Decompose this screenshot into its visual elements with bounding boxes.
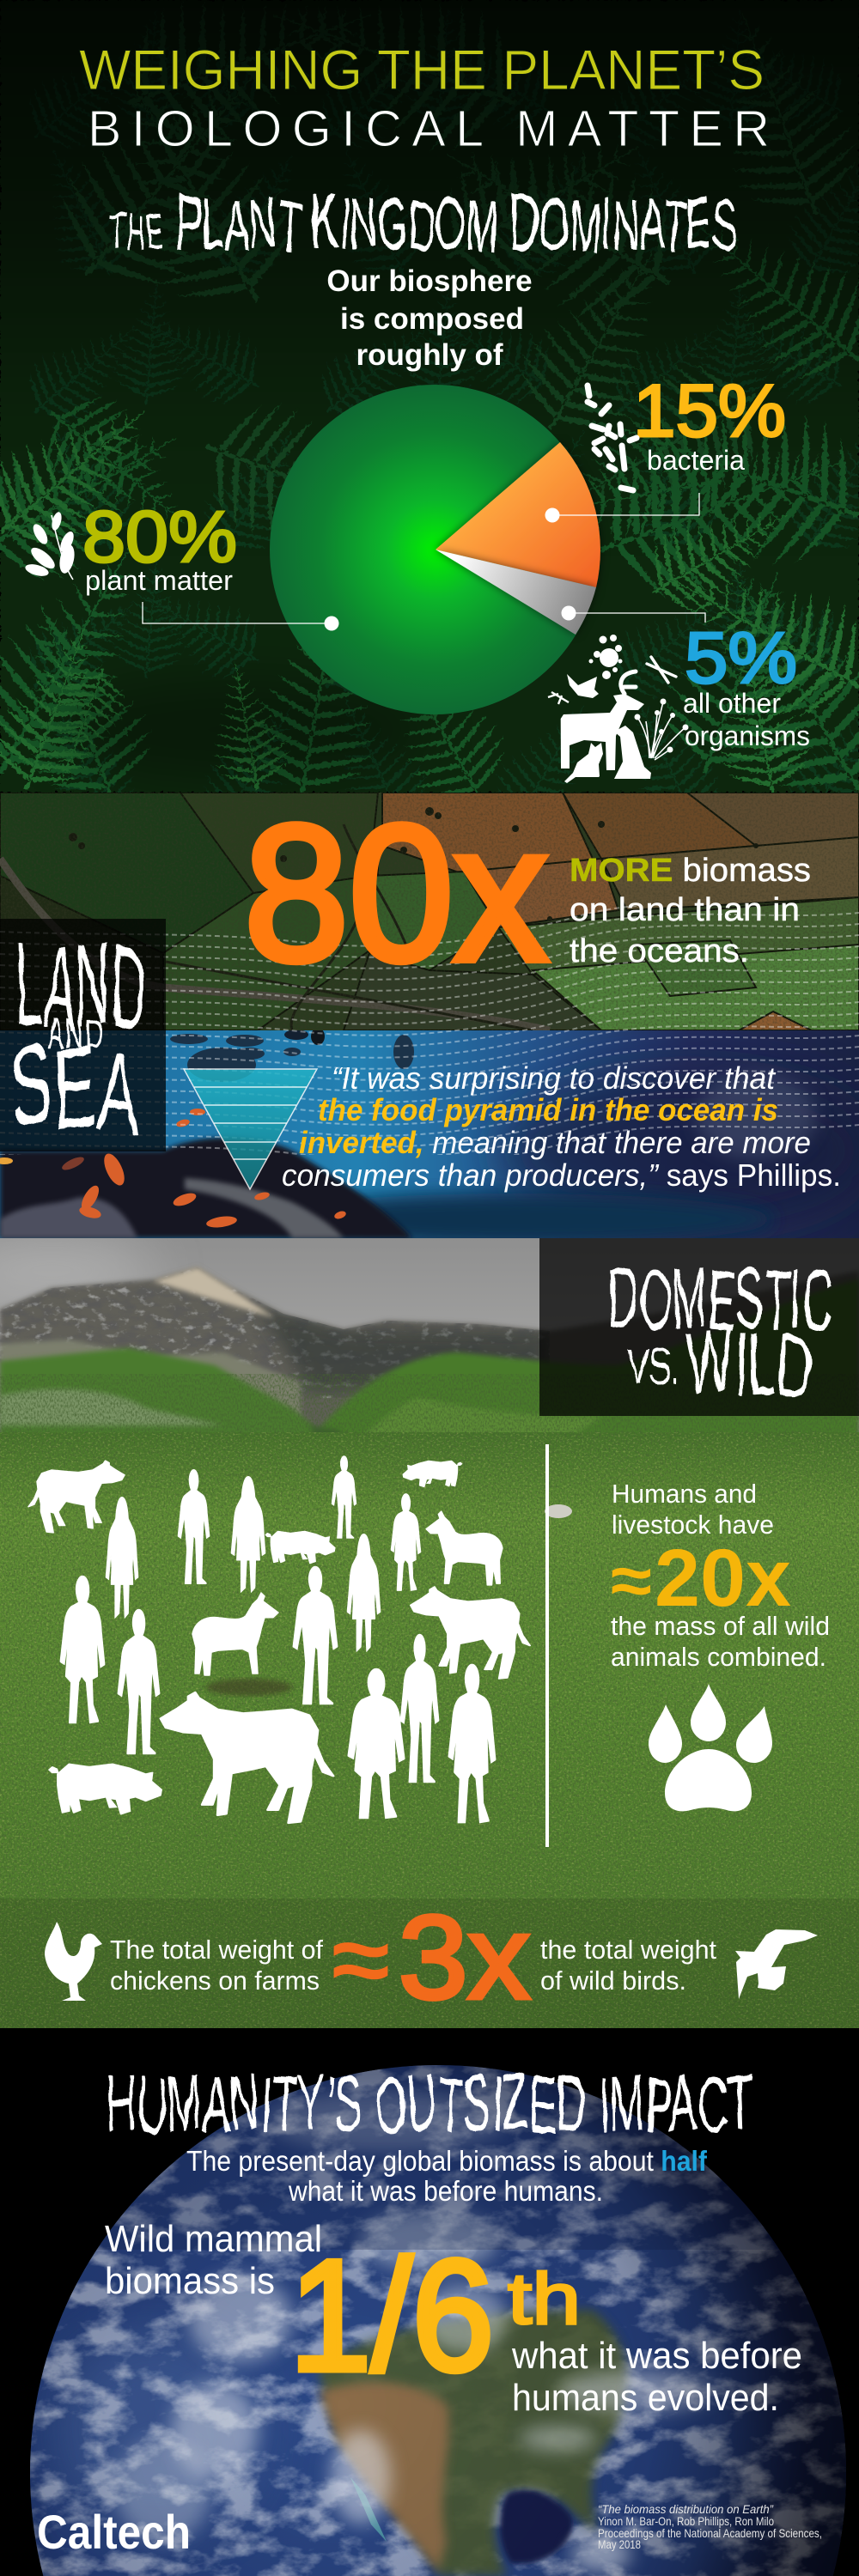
stat: 3x: 3x (399, 1892, 530, 2024)
fish (0, 1109, 347, 1229)
title box: land and sea (0, 919, 166, 1156)
text block: humans and livestock (611, 1479, 830, 1672)
citation: Yinon M. Bar-On, Rob Phillips, Ron Milo (598, 2514, 774, 2528)
icon: leaf sprig (24, 511, 76, 580)
leader dots (325, 508, 576, 630)
text block: before humans evolved (511, 2335, 802, 2419)
citation: “The biomass distribution on Earth” (598, 2502, 774, 2516)
quote (282, 1060, 841, 1193)
text block: wild birds: of wild birds. (540, 1965, 686, 1996)
text block: global biomass (186, 2145, 708, 2207)
stat: 5% other organisms: 5% (685, 617, 797, 698)
text block: intro (326, 264, 533, 372)
stat: 80% plant matter: 80% (82, 496, 237, 577)
text block: global biomass: The present-day global biomass is about half (186, 2145, 708, 2177)
pie chart (270, 385, 600, 714)
leader lines (143, 493, 705, 623)
pie slice: other organisms (436, 550, 596, 635)
text block: more biomass (570, 853, 811, 969)
panel: humanity's impact (30, 2065, 846, 2576)
text block: before humans evolved: humans evolved. (512, 2377, 779, 2419)
title line 2: BIOLOGICAL MATTER (88, 100, 770, 157)
heading: sea: SEA (0, 1021, 146, 1156)
text block: chickens: The total weight of (110, 1935, 323, 1965)
text block: wild mammal (105, 2218, 322, 2302)
text block: intro: is composed (340, 302, 524, 336)
wavy dashed lines (0, 902, 859, 1170)
seabed rock (0, 1138, 412, 1238)
citation (598, 2502, 822, 2551)
title line 1: WEIGHING THE PLANET’S (79, 38, 765, 101)
mountains (0, 1267, 859, 1432)
text block: humans and livestock: 20x (655, 1533, 791, 1624)
text block: chickens: chickens on farms (110, 1965, 320, 1996)
quote: inverted, meaning that there are more (299, 1125, 811, 1160)
text block: humans and livestock: the mass of all wild (611, 1611, 830, 1641)
icon: other organisms (548, 635, 689, 783)
text block: intro: roughly of (356, 338, 503, 372)
text block: wild birds (540, 1935, 716, 1996)
text block: humans and livestock: animals combined. (611, 1642, 826, 1672)
panel: domestic vs wild (0, 1236, 859, 2028)
stat: 5% other organisms (683, 617, 810, 751)
text block: more biomass: the oceans. (570, 933, 749, 969)
text block: before humans evolved: what it was before (511, 2335, 802, 2377)
text block: wild birds: the total weight (540, 1935, 716, 1965)
title (79, 38, 770, 157)
stat: 80% plant matter: plant matter (85, 565, 233, 596)
text block: wild mammal: biomass is (105, 2260, 275, 2302)
land fields (0, 793, 859, 1030)
stat: 5% other organisms: all other (683, 688, 781, 719)
stat: 3x: ≈ (332, 1907, 390, 2013)
divider line (545, 1444, 549, 1847)
text block: humans and livestock: livestock have (612, 1510, 774, 1540)
title box: domestic vs wild (539, 1238, 859, 1417)
icon: wild bird (735, 1929, 818, 1999)
quote: “It was surprising to discover that (332, 1060, 777, 1096)
stat: 3x (332, 1892, 530, 2024)
text block: intro: Our biosphere (326, 264, 533, 298)
icon: paw (649, 1684, 772, 1811)
panel: land (0, 793, 859, 1030)
stat: 15% bacteria: 15% (633, 370, 786, 453)
heading: humanity's outsized impact: HUMANITY’S OUTSIZED IMPACT (104, 2059, 754, 2150)
text block: humans and livestock: ≈ (611, 1542, 652, 1619)
stat: 1/6th: th (508, 2258, 581, 2339)
inverted food pyramid (184, 1069, 317, 1189)
silhouettes: humans and livestock (28, 1456, 530, 1823)
quote: consumers than producers,” says Phillips. (282, 1157, 841, 1193)
text block: wild mammal: Wild mammal (105, 2218, 322, 2260)
heading: and: AND (46, 1012, 104, 1057)
text block: humans and livestock: Humans and (612, 1479, 757, 1509)
citation: May 2018 (598, 2537, 641, 2551)
stat: 15% bacteria: bacteria (647, 445, 745, 476)
heading: land: LAND (11, 919, 150, 1054)
stat: 5% other organisms: organisms (685, 720, 810, 751)
panel: ocean (0, 1028, 859, 1245)
text block: global biomass: what it was before humans. (288, 2175, 603, 2207)
logo: caltech: Caltech (37, 2505, 191, 2559)
heading: wild: WILD (683, 1312, 816, 1417)
cloud swirls (116, 2091, 713, 2572)
continent: north america (318, 2310, 627, 2576)
heading: the plant kingdom dominates: THE PLANT KINGDOM DOMINATES (107, 175, 740, 268)
text block: more biomass: on land than in (570, 892, 800, 928)
trees (69, 807, 758, 921)
panel: plant kingdom (0, 0, 859, 829)
quote: the food pyramid in the ocean is (318, 1092, 778, 1127)
heading: vs: VS. (627, 1338, 679, 1395)
text block: chickens (110, 1935, 323, 1996)
icon: chicken (45, 1922, 102, 2001)
stat: 1/6th: 1/6 (289, 2227, 494, 2403)
icon: bacteria (588, 386, 637, 490)
pie slice: bacteria (436, 442, 600, 587)
stat: 80x: 80x (244, 784, 548, 1001)
dark fish school (170, 1028, 414, 1082)
earth (26, 2061, 850, 2576)
text block: more biomass: MORE biomass (570, 853, 811, 889)
